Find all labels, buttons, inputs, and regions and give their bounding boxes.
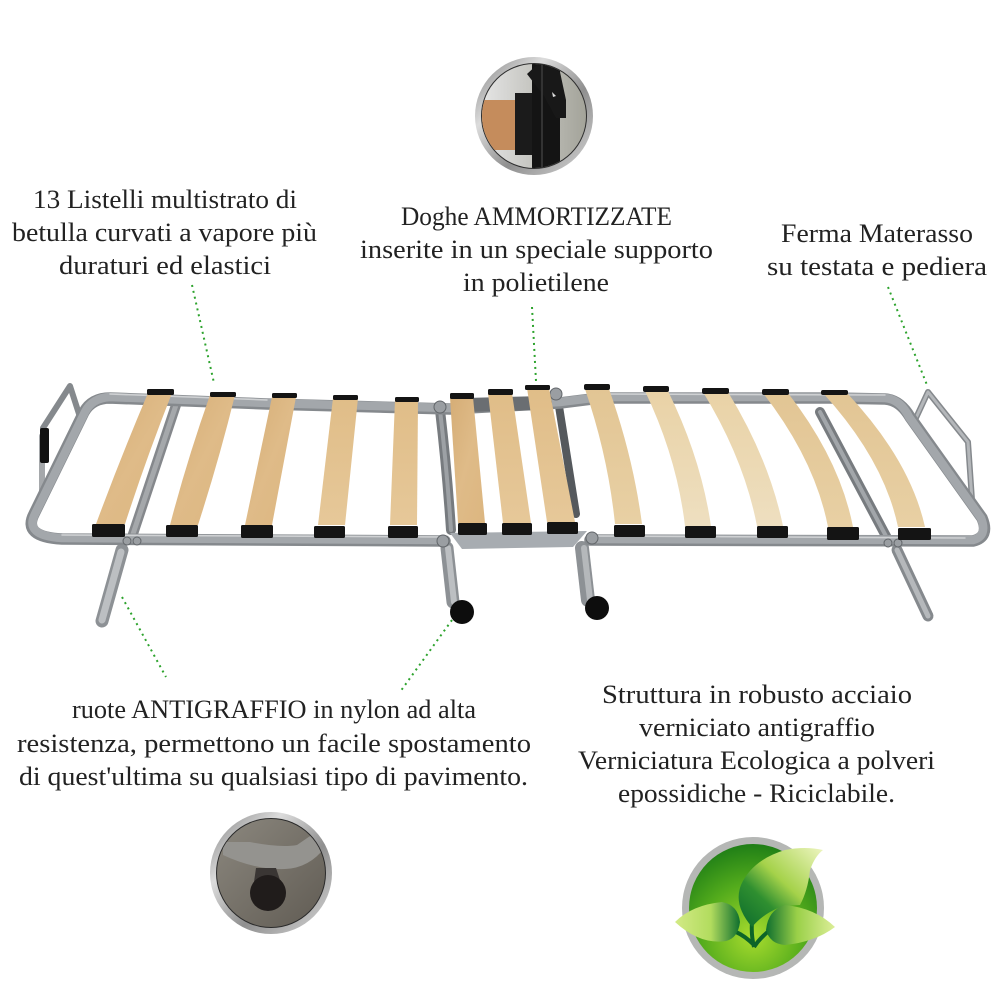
right leaf bbox=[766, 905, 835, 945]
big leaf bbox=[739, 848, 823, 927]
tubular steel frame bbox=[31, 394, 985, 541]
slat end caps bbox=[92, 384, 931, 540]
legs and cross supports bbox=[102, 400, 928, 621]
dotted leader: fixed leg bbox=[122, 597, 166, 677]
icon: caster wheel detail photo bbox=[210, 812, 332, 934]
text: wheels description: di quest'ultima su qualsiasi tipo di pavimento. bbox=[19, 762, 528, 791]
text: slats description: duraturi ed elastici bbox=[59, 251, 271, 280]
text: wheels description: ruote ANTIGRAFFIO in nylon ad alta bbox=[72, 695, 476, 724]
text: steel structure description: Verniciatura Ecologica a polveri bbox=[578, 746, 935, 775]
leaf stems bbox=[736, 922, 770, 947]
text: wheels description: resistenza, permettono un facile spostamento bbox=[17, 729, 531, 758]
text: shock-absorbing slats description: in polietilene bbox=[463, 268, 609, 297]
text: wheels description bbox=[17, 695, 531, 791]
text: mattress stop description bbox=[767, 219, 988, 281]
center hinge plate bbox=[450, 531, 587, 549]
hinge joints bbox=[123, 388, 902, 547]
dotted leader: mattress stop bbox=[888, 287, 927, 385]
dotted leader: slats bbox=[192, 285, 214, 383]
text: shock-absorbing slats description: inserite in un speciale supporto bbox=[360, 235, 713, 264]
text: slats description: betulla curvati a vapore più bbox=[12, 218, 317, 247]
icon: black grip bbox=[40, 428, 49, 463]
dotted leader: wheel bbox=[400, 620, 452, 692]
text: steel structure description: verniciato antigraffio bbox=[639, 713, 875, 742]
text: shock-absorbing slats description bbox=[360, 202, 713, 297]
text: shock-absorbing slats description: Doghe AMMORTIZZATE bbox=[401, 202, 672, 231]
text: steel structure description bbox=[578, 680, 935, 808]
icon: wheels bbox=[450, 596, 609, 624]
mattress stop handles bbox=[37, 386, 975, 508]
text: slats description bbox=[12, 185, 317, 280]
icon: eco leaves badge bbox=[675, 837, 835, 979]
folding bed frame bbox=[31, 384, 985, 624]
left leaf bbox=[675, 902, 740, 942]
text: mattress stop description: Ferma Materasso bbox=[781, 219, 973, 248]
wooden slats bbox=[96, 388, 925, 527]
text: steel structure description: epossidiche - Riciclabile. bbox=[618, 779, 895, 808]
text: mattress stop description: su testata e pediera bbox=[767, 252, 988, 281]
icon: slat support detail photo bbox=[475, 57, 593, 175]
text: slats description: 13 Listelli multistrato di bbox=[33, 185, 297, 214]
text: steel structure description: Struttura in robusto acciaio bbox=[602, 680, 912, 709]
dotted leader: support bbox=[532, 307, 536, 381]
